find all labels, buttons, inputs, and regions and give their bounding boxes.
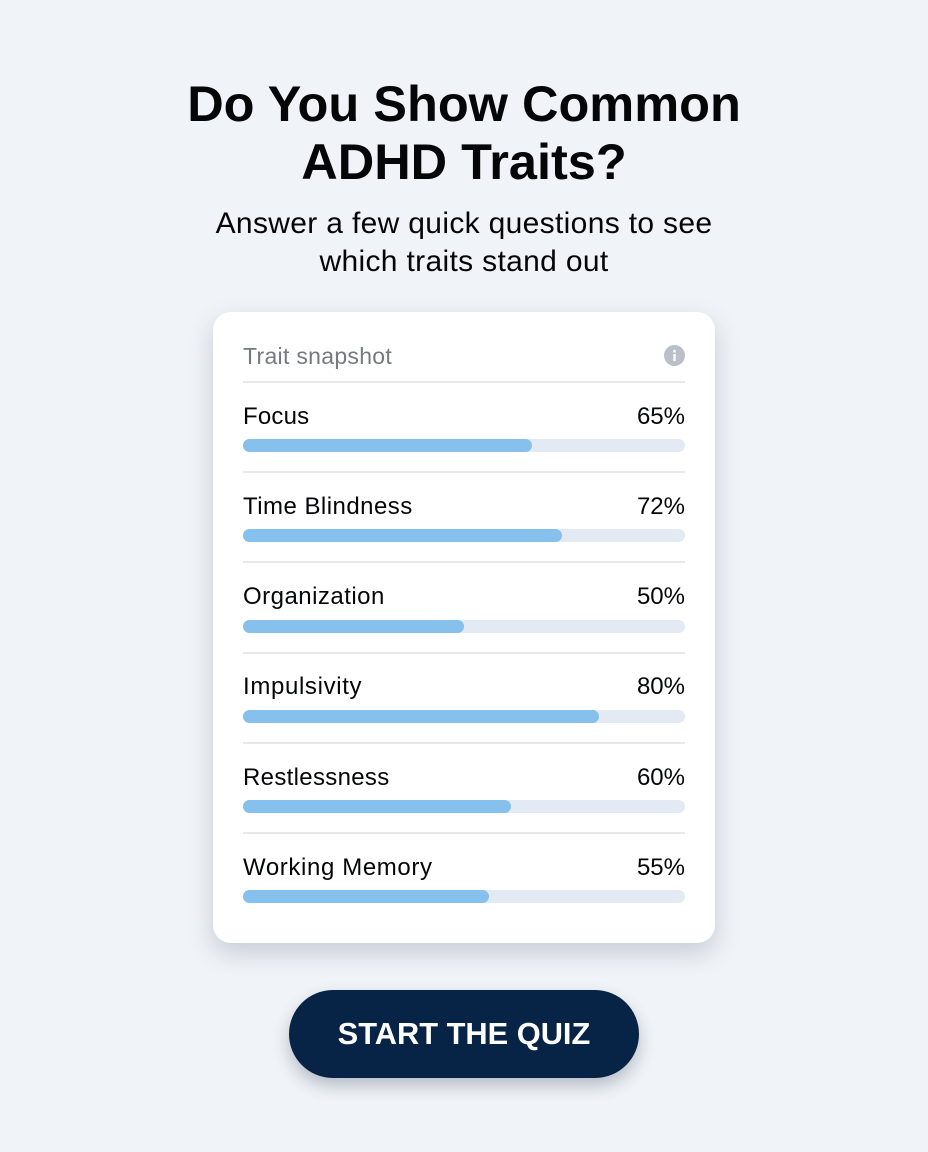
row: Restlessness: Restlessness [243, 764, 390, 791]
row: Focus: Focus [243, 403, 309, 430]
card heading: Trait snapshot [243, 343, 392, 369]
title: Do You Show Common [187, 75, 741, 132]
row: Organization: 50% [637, 583, 685, 610]
row: Focus: 65% [637, 403, 685, 430]
row: Time Blindness: Time Blindness [243, 493, 413, 520]
title: ADHD Traits? [301, 133, 627, 190]
title [187, 75, 741, 190]
panel: trait snapshot card [213, 312, 715, 943]
button: start the quiz [289, 990, 639, 1078]
row: Focus [243, 381, 685, 452]
row: Working Memory [243, 832, 685, 903]
row: Working Memory: Working Memory [243, 854, 433, 881]
row: Organization [243, 561, 685, 633]
subtitle: which traits stand out [319, 245, 609, 278]
row: Restlessness: 60% [637, 764, 685, 791]
icon: info [664, 345, 685, 366]
button: start the quiz: START THE QUIZ [338, 1016, 590, 1051]
row: Impulsivity: Impulsivity [243, 673, 362, 700]
subtitle: Answer a few quick questions to see [216, 207, 712, 240]
subtitle [216, 207, 712, 278]
row: Restlessness [243, 742, 685, 813]
row: Impulsivity [243, 652, 685, 723]
row: Organization: Organization [243, 583, 385, 610]
row: Time Blindness [243, 471, 685, 542]
row: Impulsivity: 80% [637, 673, 685, 700]
row: Working Memory: 55% [637, 854, 685, 881]
row: Time Blindness: 72% [637, 493, 685, 520]
